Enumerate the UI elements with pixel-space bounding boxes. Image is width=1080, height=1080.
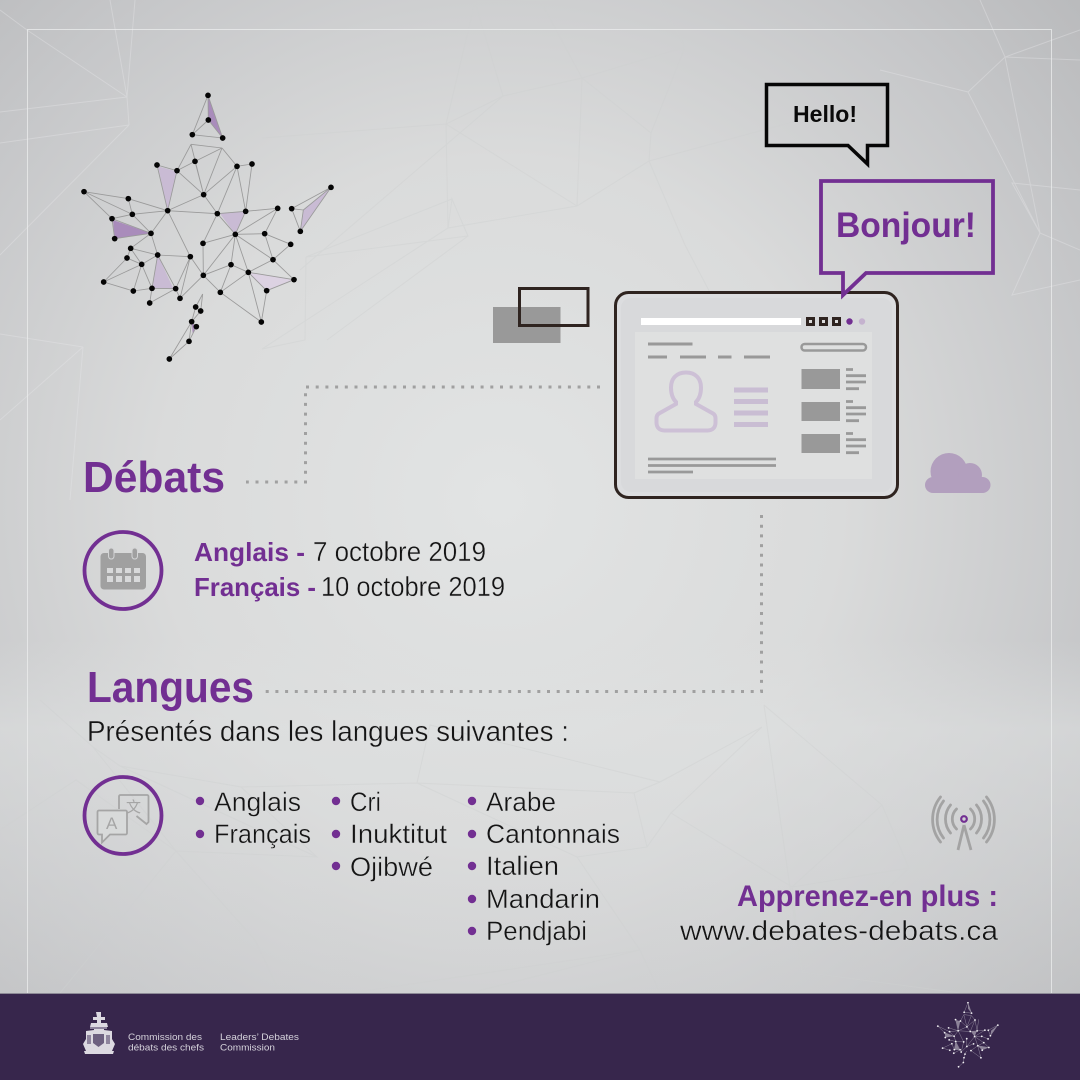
speech bubble: Bonjour: Bonjour! — [836, 206, 976, 245]
connector: tablet to Débats — [246, 387, 600, 482]
column 3 — [468, 787, 620, 946]
profile text bars — [734, 388, 768, 427]
icon: small maple leaf — [937, 1002, 999, 1068]
thumbnails — [802, 369, 840, 453]
organisation names: débats des chefs — [128, 1042, 204, 1054]
page header lines — [648, 344, 770, 357]
footer — [0, 993, 1080, 1080]
icon: translation: A — [106, 814, 118, 833]
column 3: Cantonnais — [486, 819, 620, 849]
heading: Langues: Langues — [87, 663, 254, 712]
speech bubble: Hello — [766, 84, 888, 164]
organisation names: Commission — [220, 1042, 275, 1054]
column 3: Italien — [486, 851, 559, 881]
icon: translation: 文 — [126, 799, 141, 816]
icon: calendar — [84, 532, 162, 609]
thumbnail captions — [846, 370, 866, 453]
call to action: Apprenez-en plus : — [737, 880, 998, 913]
decorative rectangles — [493, 288, 588, 343]
column 1: Français — [214, 819, 311, 849]
call to action — [679, 880, 998, 946]
heading: Débats: Débats — [83, 453, 225, 502]
tablet — [616, 292, 898, 498]
debate dates: 7 octobre 2019 — [313, 536, 486, 567]
icon: coat of arms — [83, 1012, 115, 1054]
column 2: Inuktitut — [350, 819, 448, 849]
address bar — [641, 317, 865, 326]
debate dates: 10 octobre 2019 — [321, 571, 505, 602]
connector: tablet to Langues — [263, 515, 762, 692]
icon: broadcast antenna — [933, 797, 994, 850]
search field — [802, 344, 866, 350]
column 1: Anglais — [214, 787, 301, 817]
call to action: www.debates-debats.ca — [679, 915, 998, 946]
language list — [196, 787, 620, 946]
column 3: Pendjabi — [486, 916, 587, 946]
debate dates — [194, 536, 505, 602]
profile icon — [656, 372, 716, 430]
column 3: Arabe — [486, 787, 556, 817]
column 2: Cri — [350, 787, 381, 817]
organisation names — [128, 1032, 299, 1054]
footer text lines — [648, 459, 776, 472]
debate dates: Français - — [194, 572, 316, 602]
organisation names: Leaders’ Debates — [220, 1032, 299, 1043]
column 1 — [196, 787, 311, 849]
speech bubble: Bonjour — [821, 181, 993, 295]
speech bubble: Hello: Hello! — [793, 101, 857, 127]
column 3: Mandarin — [486, 884, 600, 914]
icon: polygon maple leaf — [81, 92, 334, 362]
icon: cloud — [925, 453, 990, 493]
column 2 — [332, 787, 448, 882]
organisation names: Commission des — [128, 1032, 202, 1043]
column 2: Ojibwé — [350, 852, 433, 882]
debate dates: Anglais - — [194, 537, 305, 567]
icon: translation — [84, 777, 162, 854]
languages intro: Présentés dans les langues suivantes : — [87, 716, 569, 748]
